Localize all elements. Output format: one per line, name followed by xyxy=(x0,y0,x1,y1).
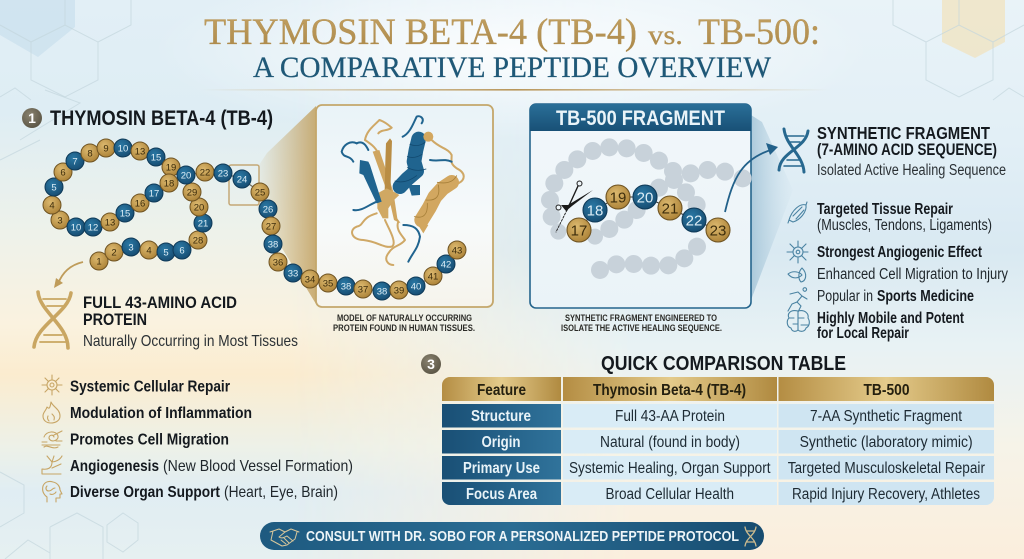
peptide chain: full 43 amino acids: 18 xyxy=(164,178,174,190)
protein ribbon model xyxy=(342,116,464,265)
fragment beads 17 to 23: 21 xyxy=(662,200,678,218)
row: origin: Natural (found in body) xyxy=(600,434,740,451)
peptide chain: full 43 amino acids: 35 xyxy=(323,278,333,290)
text: full protein xyxy=(83,293,298,350)
text: full protein: Naturally Occurring in Most Tissues xyxy=(83,333,298,350)
text: full protein: FULL 43-AMINO ACID xyxy=(83,293,237,312)
table cells xyxy=(442,377,994,505)
fragment beads 17 to 23: 20 xyxy=(637,190,653,206)
peptide chain: full 43 amino acids: 42 xyxy=(441,260,451,270)
icon: handshake xyxy=(270,529,299,546)
list: TB-500 benefits: Strongest Angiogenic Effect xyxy=(817,244,982,261)
list: TB-500 benefits: Popular in xyxy=(817,288,873,305)
call to action banner xyxy=(260,522,764,550)
row: focus area: Rapid Injury Recovery, Athletes xyxy=(792,486,980,503)
peptide chain: full 43 amino acids: 23 xyxy=(218,168,228,180)
list: TB-500 benefits: for Local Repair xyxy=(817,325,909,342)
fragment beads 17 to 23: 23 xyxy=(710,222,726,240)
peptide chain: full 43 amino acids: 37 xyxy=(358,284,368,296)
peptide chain: full 43 amino acids: 4 xyxy=(146,246,152,256)
text: full protein: PROTEIN xyxy=(83,310,147,329)
peptide chain: full 43 amino acids: 6 xyxy=(179,246,185,256)
row: origin: Origin xyxy=(482,434,520,451)
peptide chain: full 43 amino acids: 25 xyxy=(255,188,265,198)
peptide chain: full 43 amino acids: 7 xyxy=(72,156,78,168)
text: synthetic fragment: SYNTHETIC FRAGMENT xyxy=(817,123,990,143)
heading: section 1: THYMOSIN BETA-4 (TB-4) xyxy=(50,107,273,130)
title xyxy=(204,12,820,84)
icon: small DNA xyxy=(745,527,756,546)
icon: brain xyxy=(787,311,809,331)
panel: protein model xyxy=(316,105,493,307)
caption: protein model: MODEL OF NATURALLY OCCURRING xyxy=(337,313,472,323)
list: TB-500 benefits: Targeted Tissue Repair xyxy=(817,201,953,218)
comparison table xyxy=(442,377,994,505)
peptide chain: full 43 amino acids: 40 xyxy=(411,282,421,292)
peptide chain: full 43 amino acids: 20 xyxy=(181,170,191,182)
caption: protein model: PROTEIN FOUND IN HUMAN TISSUES. xyxy=(333,323,475,333)
table header row xyxy=(477,382,910,399)
peptide chain: full 43 amino acids: 13 xyxy=(135,146,145,158)
peptide chain: full 43 amino acids: 15 xyxy=(120,208,130,220)
icon: muscle xyxy=(788,202,807,223)
icon: head with brain xyxy=(43,481,62,502)
fragment beads 17 to 23: 17 xyxy=(571,222,587,240)
peptide chain: full 43 amino acids: 29 xyxy=(187,188,197,198)
caption: TB-500 fragment xyxy=(561,313,722,333)
icon: blood vessel star xyxy=(787,241,808,263)
icon: runner xyxy=(788,288,807,312)
list: TB-500 benefits xyxy=(787,201,1008,342)
icon: blue DNA helix xyxy=(779,129,808,172)
arrow: fragment to synthetic DNA xyxy=(725,143,778,212)
caption: protein model xyxy=(333,313,475,333)
fragment beads 17 to 23: 22 xyxy=(686,212,702,230)
row: focus area: Broad Cellular Health xyxy=(606,486,734,503)
icon: scissors xyxy=(556,181,593,232)
icon: cell migration xyxy=(788,268,806,282)
peptide chain: full 43 amino acids: 10 xyxy=(118,144,128,154)
peptide chain: full 43 amino acids: 24 xyxy=(237,174,247,186)
peptide chain: full 43 amino acids: 17 xyxy=(149,188,159,200)
peptide chain: full 43 amino acids: 28 xyxy=(193,236,203,246)
panel header: TB-500 FRAGMENT xyxy=(556,107,725,130)
peptide chain: full 43 amino acids: 4 xyxy=(49,200,55,212)
table header row: Thymosin Beta-4 (TB-4) xyxy=(593,382,746,399)
row: primary use: Systemic Healing, Organ Support xyxy=(569,460,771,477)
highlight square xyxy=(229,165,259,205)
list: TB-4 benefits: Angiogenesis xyxy=(70,458,159,475)
title: A COMPARATIVE PEPTIDE OVERVIEW xyxy=(253,51,772,84)
peptide chain: full 43 amino acids: 9 xyxy=(103,144,109,154)
icon: cell xyxy=(42,375,62,395)
call to action banner: CONSULT WITH DR. SOBO FOR A PERSONALIZED PEPTIDE PROTOCOL xyxy=(306,529,739,545)
peptide chain: full 43 amino acids: 8 xyxy=(87,148,93,160)
title: THYMOSIN BETA-4 (TB-4) xyxy=(204,12,637,53)
title: vs. xyxy=(648,20,683,50)
fragment beads 17 to 23 xyxy=(567,185,730,242)
caption: TB-500 fragment: SYNTHETIC FRAGMENT ENGINEERED TO xyxy=(565,313,717,323)
list: TB-4 benefits: (Heart, Eye, Brain) xyxy=(224,484,338,501)
list: TB-4 benefits: Systemic Cellular Repair xyxy=(70,378,230,396)
peptide chain: full 43 amino acids: 3 xyxy=(57,216,63,226)
heading: quick comparison table: 3 xyxy=(427,356,435,372)
peptide chain: full 43 amino acids: 1 xyxy=(96,256,102,268)
list: TB-500 benefits: Highly Mobile and Potent xyxy=(817,310,964,327)
peptide chain: full 43 amino acids xyxy=(43,139,466,300)
peptide chain: full 43 amino acids: 22 xyxy=(200,168,210,178)
heading: quick comparison table xyxy=(421,353,846,375)
list: TB-4 benefits xyxy=(42,375,353,502)
row: structure: Full 43-AA Protein xyxy=(615,408,725,425)
peptide chain: full 43 amino acids: 27 xyxy=(266,222,276,232)
list: TB-500 benefits: Sports Medicine xyxy=(877,288,974,305)
peptide chain: full 43 amino acids: 10 xyxy=(71,222,81,234)
peptide chain: full 43 amino acids: 19 xyxy=(166,162,176,174)
row: primary use: Targeted Musculoskeletal Repair xyxy=(788,460,985,477)
title: TB-500: xyxy=(698,12,820,53)
peptide chain: full 43 amino acids: 26 xyxy=(263,204,273,216)
peptide chain: full 43 amino acids: 21 xyxy=(198,218,208,230)
peptide chain: full 43 amino acids: 13 xyxy=(105,218,115,228)
row: origin xyxy=(482,434,973,451)
icon: flame xyxy=(43,402,60,423)
panel: TB-500 fragment xyxy=(530,104,752,308)
row: primary use: Primary Use xyxy=(463,460,540,477)
peptide chain: full 43 amino acids: 16 xyxy=(135,198,145,210)
row: structure xyxy=(471,408,963,425)
peptide chain: full 43 amino acids: 2 xyxy=(111,248,117,258)
fragment beads 17 to 23: 18 xyxy=(587,202,603,220)
peptide chain: full 43 amino acids: 38 xyxy=(341,282,351,292)
list: TB-4 benefits: Diverse Organ Support xyxy=(70,484,221,501)
row: focus area: Focus Area xyxy=(466,486,537,503)
peptide chain: full 43 amino acids: 36 xyxy=(273,258,283,268)
heading: quick comparison table: QUICK COMPARISON TABLE xyxy=(601,353,846,375)
peptide chain: full 43 amino acids: 38 xyxy=(377,286,387,298)
peptide chain: full 43 amino acids: 5 xyxy=(163,248,169,258)
zoom wedge to protein model xyxy=(257,106,316,304)
icon: gold DNA helix xyxy=(34,292,71,348)
peptide chain: full 43 amino acids: 15 xyxy=(151,152,161,164)
peptide chain: full 43 amino acids: 33 xyxy=(288,268,298,280)
row: primary use xyxy=(463,460,985,477)
icon: vessel growth xyxy=(42,456,62,474)
wedge behind TB-500 panel xyxy=(751,115,793,300)
peptide chain: full 43 amino acids: 43 xyxy=(452,246,462,256)
peptide chain: full 43 amino acids: 34 xyxy=(305,274,315,286)
row: structure: Structure xyxy=(471,408,531,425)
peptide chain: full 43 amino acids: 39 xyxy=(394,286,404,296)
peptide chain: full 43 amino acids: 6 xyxy=(60,168,66,178)
list: TB-4 benefits: (New Blood Vessel Formation) xyxy=(163,458,353,475)
peptide chain: full 43 amino acids: 3 xyxy=(128,242,134,254)
heading: section 1: 1 xyxy=(28,110,36,126)
icon: cell migration xyxy=(42,431,62,448)
text: synthetic fragment xyxy=(817,123,1006,179)
peptide chain: full 43 amino acids: 20 xyxy=(194,202,204,214)
list: TB-4 benefits: Promotes Cell Migration xyxy=(70,432,229,448)
row: focus area xyxy=(466,486,980,503)
peptide chain: full 43 amino acids: 41 xyxy=(428,272,438,282)
faded full chain xyxy=(541,138,752,279)
arrow: chain to DNA xyxy=(54,262,83,288)
fragment beads 17 to 23: 19 xyxy=(610,190,626,206)
peptide chain: full 43 amino acids: 38 xyxy=(268,240,278,250)
row: origin: Synthetic (laboratory mimic) xyxy=(800,434,973,451)
row: structure: 7-AA Synthetic Fragment xyxy=(810,408,963,425)
list: TB-4 benefits: Modulation of Inflammation xyxy=(70,405,252,422)
peptide chain: full 43 amino acids: 12 xyxy=(88,222,98,234)
caption: TB-500 fragment: ISOLATE THE ACTIVE HEALING SEQUENCE. xyxy=(561,323,722,333)
table header row: Feature xyxy=(477,382,526,399)
table header row: TB-500 xyxy=(864,382,910,399)
peptide chain: full 43 amino acids: 5 xyxy=(51,182,57,194)
